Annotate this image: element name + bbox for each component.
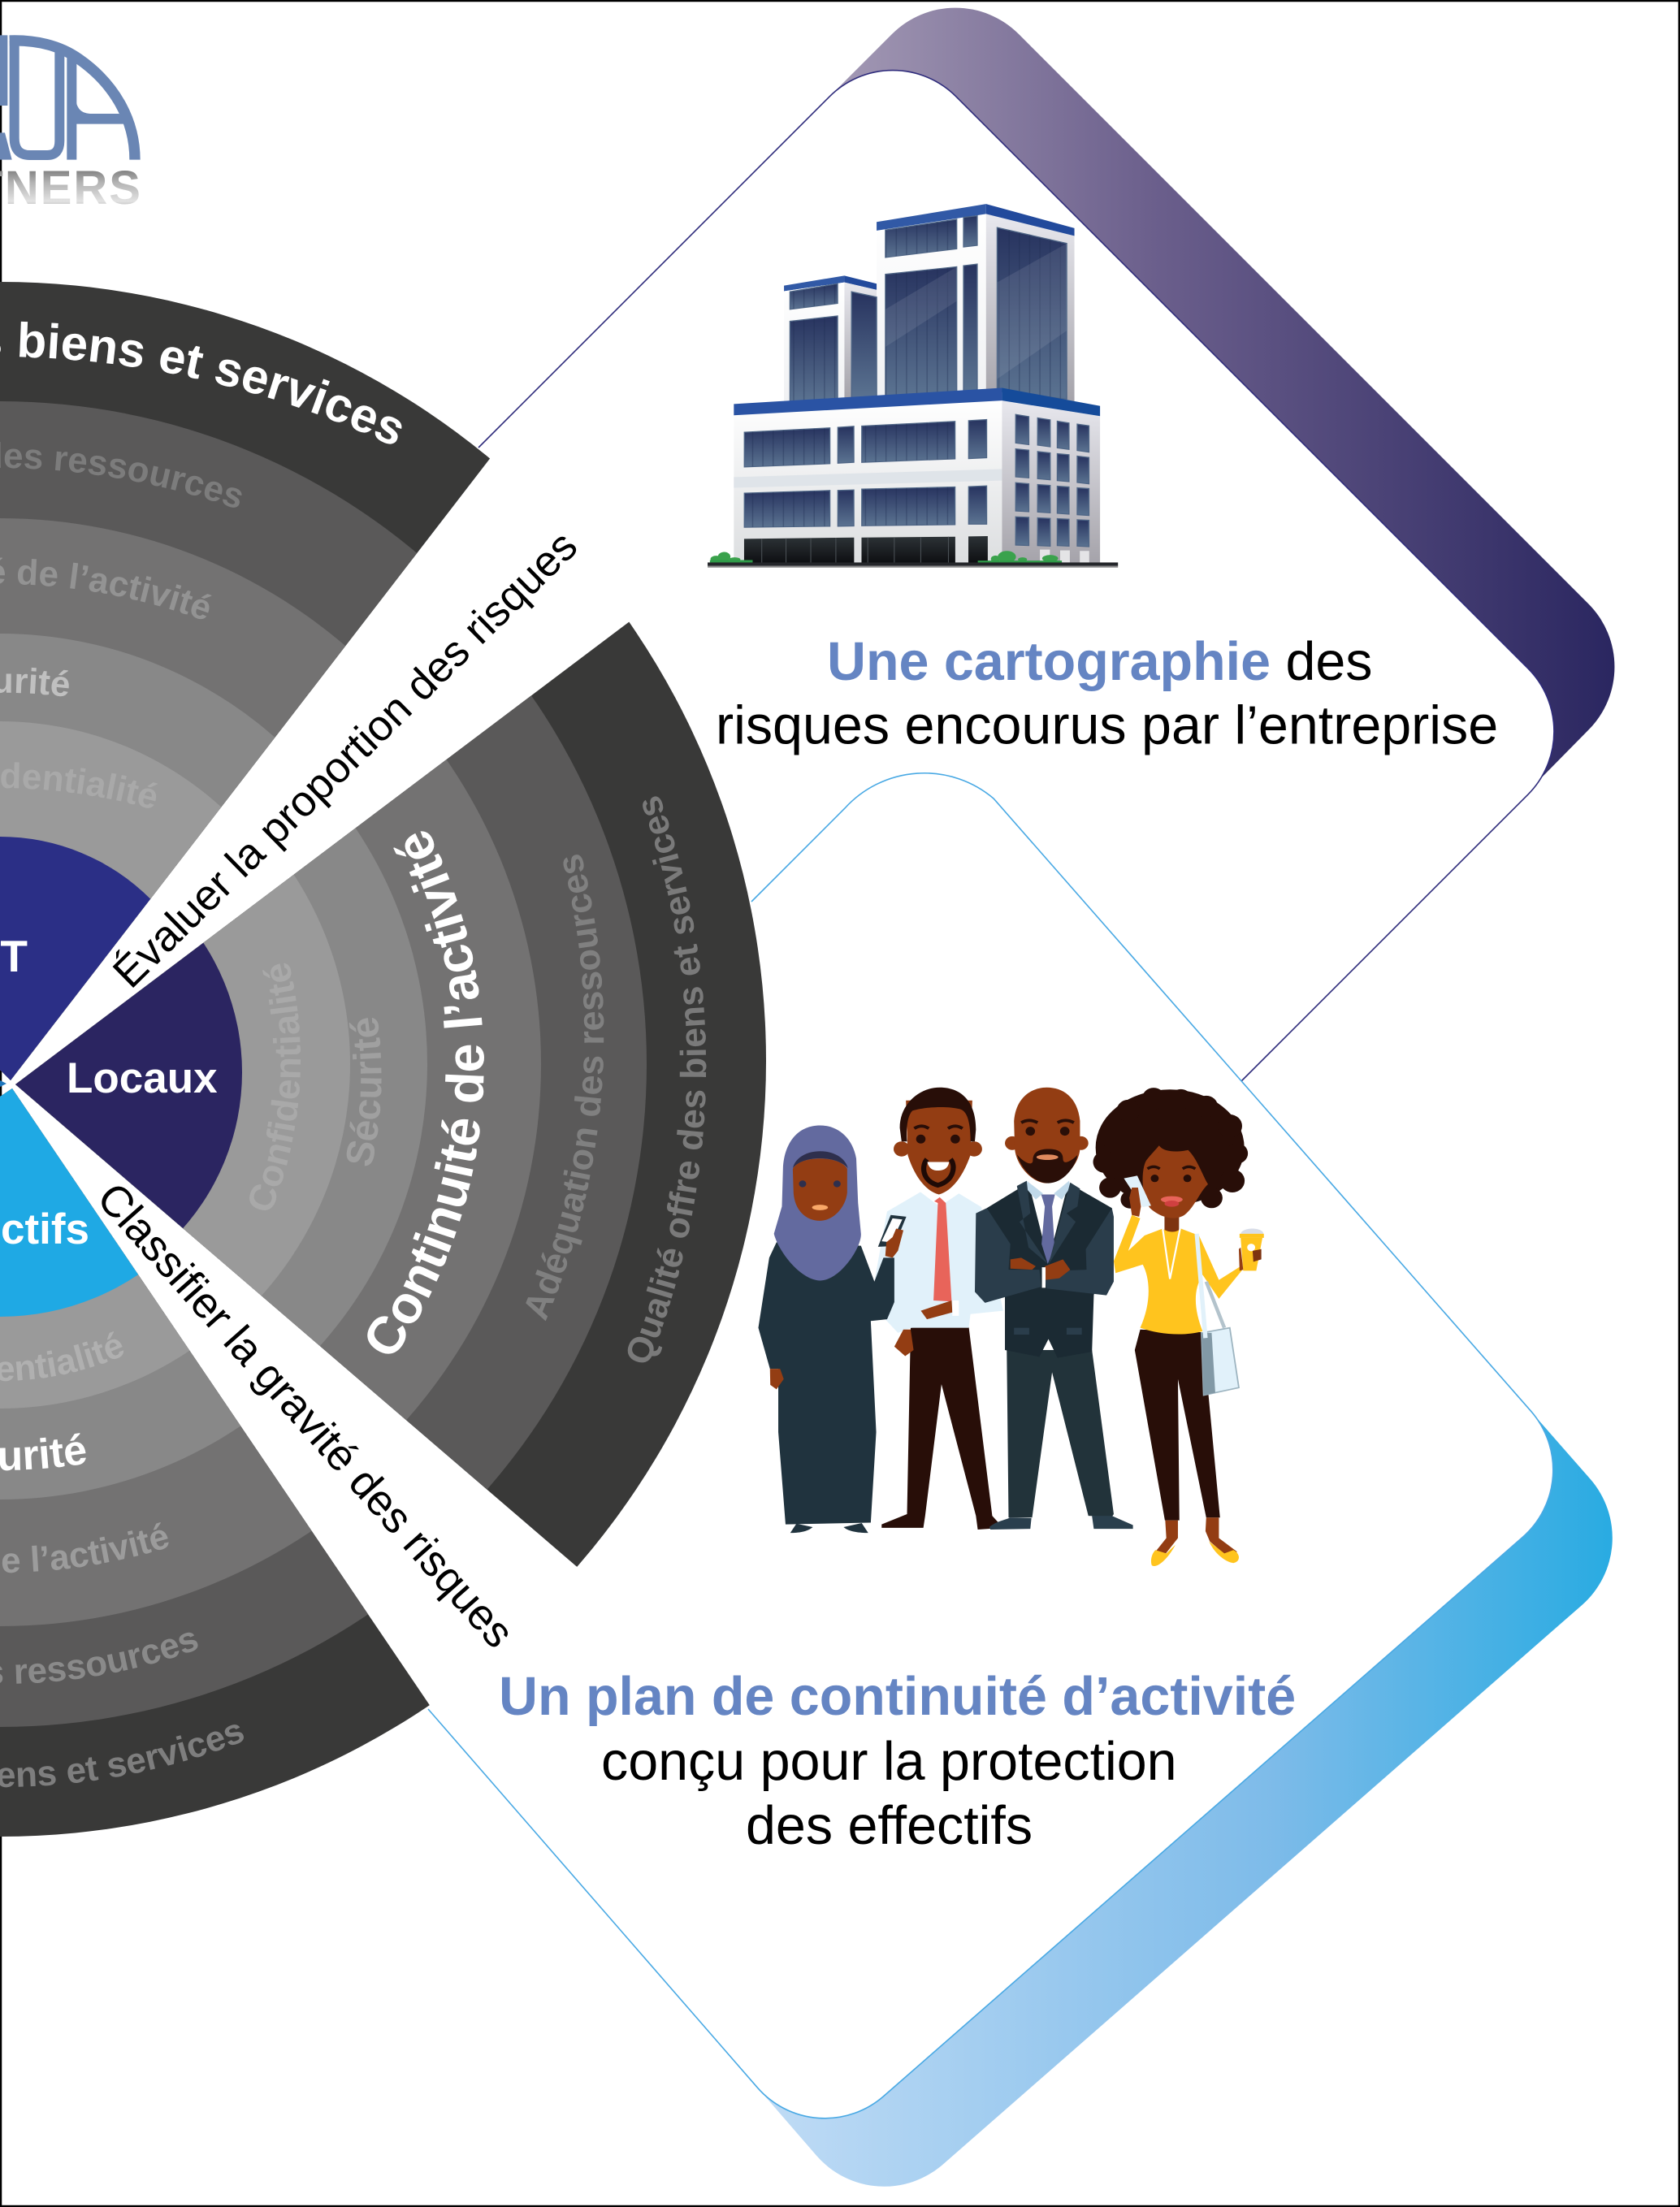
person: woman with afro [1093, 1088, 1264, 1566]
wheel: right wedge (Locaux): Locaux [67, 1054, 218, 1102]
wheel: right wedge (Locaux): Sécurité [346, 1018, 382, 1166]
panel: continuity plan diamond [167, 773, 1613, 2187]
text: risk mapping caption: risques encourus par l’entreprise [716, 695, 1498, 755]
text: risk mapping caption: Une cartographie [827, 632, 1271, 692]
text: continuity plan caption: des effectifs [746, 1796, 1033, 1856]
panel: risk mapping diamond [478, 8, 1614, 1081]
person: bald man in suit [975, 1088, 1133, 1530]
wheel: right wedge (Locaux) [15, 622, 766, 1567]
wheel: right wedge (Locaux): Confidentialité [249, 963, 301, 1210]
wheel: right wedge (Locaux): Qualité offre des biens et services [627, 796, 707, 1363]
wheel: left sliver [0, 1080, 6, 1087]
person: man in white shirt [874, 1088, 1003, 1530]
label: Évaluer: Évaluer la proportion des risques [104, 521, 587, 997]
text: risk mapping caption: des [1271, 632, 1373, 692]
person: woman in hijab [758, 1125, 907, 1533]
illustration: team of four people [758, 1088, 1264, 1566]
text: continuity plan caption: Un plan de continuité d’activité [499, 1667, 1296, 1727]
wheel: right wedge (Locaux): Continuité de l’activité [367, 831, 484, 1354]
logo [0, 35, 135, 160]
text: continuity plan caption: conçu pour la protection [601, 1732, 1177, 1792]
label: Classifier: Classifier la gravité des risques [88, 1174, 523, 1657]
wheel: bottom wedge (Effectifs) [0, 1088, 430, 1837]
wheel: right wedge (Locaux): Adéquation des ressources [526, 855, 604, 1321]
wheel: top wedge (Informatique/IT) [0, 282, 490, 1080]
icon: office building [708, 204, 1118, 568]
